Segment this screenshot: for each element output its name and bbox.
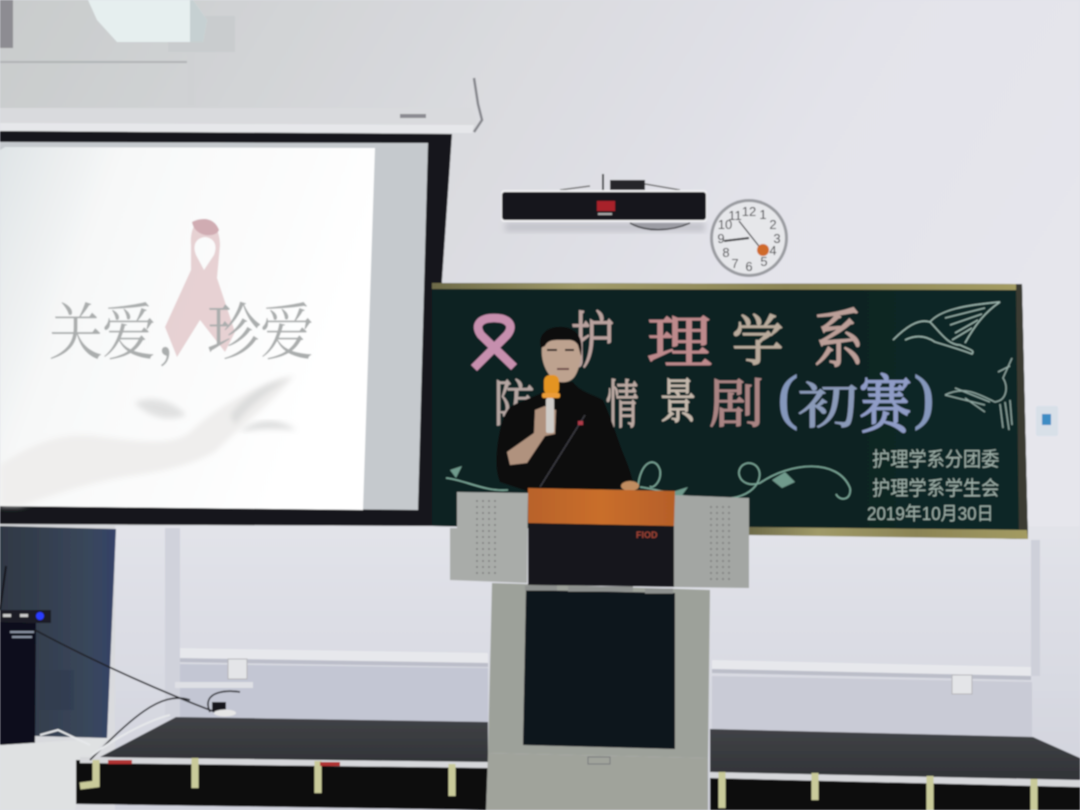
slide title: 珍 — [207, 299, 261, 368]
speaker person — [496, 327, 639, 492]
organisers text: 护理学系分团委 — [872, 448, 999, 471]
lectern — [450, 488, 749, 810]
lectern strip — [525, 588, 673, 591]
organisers text: 2019年10月30日 — [867, 503, 994, 524]
wall outlet left — [228, 659, 247, 679]
board title line 2: 赛 — [859, 371, 912, 441]
slide title: 关 — [49, 299, 103, 368]
wall clock: 11 — [728, 208, 742, 223]
lectern dark door — [523, 590, 675, 749]
lectern lower body — [488, 583, 710, 758]
wall clock — [710, 199, 788, 277]
orange wood top — [528, 488, 675, 526]
soundbar with antenna — [501, 174, 707, 232]
wall clock: 12 — [742, 204, 756, 219]
brand label: FIOD — [636, 530, 658, 540]
gooseneck mic — [540, 415, 585, 487]
projection screen housing — [0, 78, 482, 133]
right hand — [621, 481, 639, 491]
board title line 1: 系 — [814, 307, 863, 375]
projected slide — [0, 147, 375, 510]
wall rail and trunking — [165, 528, 1040, 718]
crane drawing — [945, 358, 1012, 430]
wall clock: 7 — [731, 256, 739, 271]
board title line 2 — [494, 364, 934, 441]
board title line 1: 学 — [732, 313, 784, 372]
dark console — [528, 523, 674, 587]
stage right — [710, 729, 1080, 810]
board title line 2: 剧 — [709, 375, 764, 434]
board title line 1: 理 — [647, 313, 712, 375]
wall clock: 2 — [769, 217, 777, 232]
wall clock: 3 — [773, 231, 781, 246]
organisers text: 护理学系学生会 — [872, 477, 999, 500]
stage left — [35, 630, 488, 810]
wall clock: 5 — [760, 254, 768, 269]
blackboard — [432, 283, 1028, 539]
right wing — [673, 495, 749, 588]
board title line 2: 情 — [606, 377, 639, 435]
dove drawing — [893, 302, 1000, 354]
board title line 1 — [571, 307, 863, 376]
board title line 2: 初 — [798, 379, 858, 434]
wall clock: 1 — [759, 207, 767, 222]
orange microphone — [542, 375, 560, 433]
wall clock: 6 — [745, 259, 753, 274]
projector on ceiling — [0, 0, 235, 106]
board gold frame — [432, 283, 1028, 539]
wall clock: 9 — [717, 231, 725, 246]
arm and hand — [507, 406, 556, 465]
black sweater — [496, 382, 634, 492]
vine leaves — [450, 466, 795, 498]
door panel — [40, 670, 74, 710]
board title line 2: 景 — [660, 376, 696, 429]
caring hand illustration — [0, 375, 296, 506]
projection screen surface — [0, 142, 428, 510]
card switch — [1036, 406, 1058, 436]
icon: red ribbon — [165, 219, 235, 357]
slide title: 爱 — [102, 299, 156, 368]
wall outlet right — [952, 675, 972, 694]
wall clock: 8 — [722, 245, 730, 260]
board title line 1: 护 — [571, 309, 614, 376]
lectern base — [486, 753, 708, 810]
head and face — [540, 327, 582, 382]
board title line 2: ( — [778, 364, 798, 430]
floor — [0, 738, 108, 810]
slide title: 爱 — [260, 299, 314, 368]
icon: pink ribbon — [474, 318, 514, 368]
classroom door — [0, 526, 116, 738]
left wing — [450, 492, 528, 583]
slide title — [49, 299, 314, 368]
wall clock: 10 — [718, 217, 732, 232]
board title line 2: ) — [914, 364, 934, 430]
slide title: ， — [157, 299, 211, 368]
wall clock: 4 — [769, 243, 777, 258]
projection screen frame — [0, 131, 452, 526]
vine decoration — [446, 462, 850, 499]
board title line 2: 防 — [494, 377, 534, 432]
speaker and router — [0, 566, 51, 758]
organisers text — [867, 448, 999, 524]
